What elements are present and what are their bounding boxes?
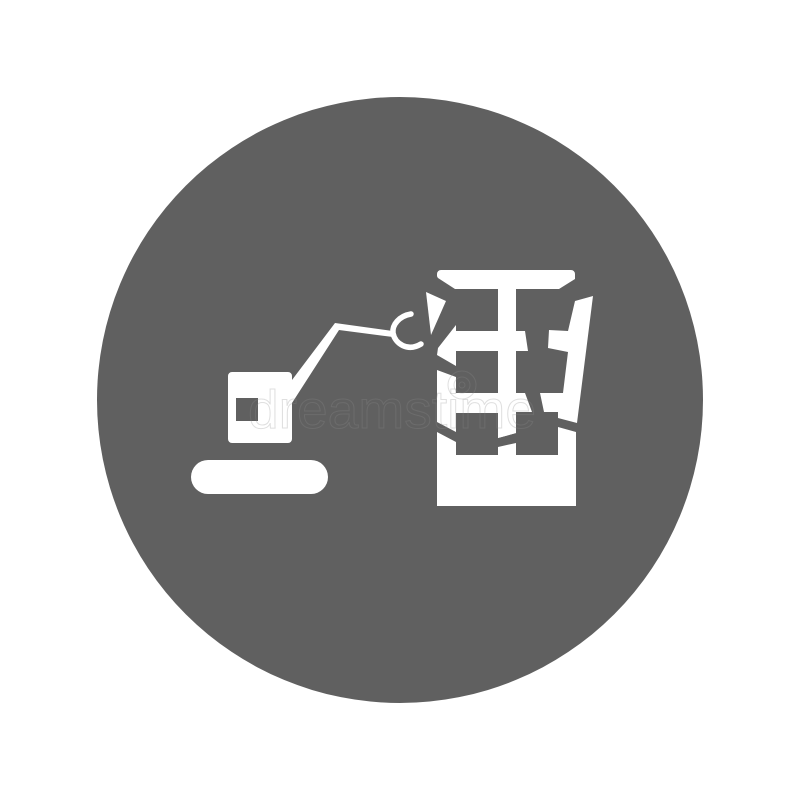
watermark text: dreamstime xyxy=(248,380,536,440)
icon: crane xyxy=(191,314,421,494)
upper floor slab xyxy=(437,325,528,366)
watermark spiral xyxy=(448,371,476,399)
crane body with window xyxy=(228,372,292,443)
roof and central column xyxy=(437,270,575,438)
crane track xyxy=(191,460,328,494)
broken wall fragment xyxy=(426,292,446,335)
icon: collapsing building xyxy=(426,270,593,506)
right wall fragment xyxy=(540,296,593,423)
crane arm xyxy=(292,323,393,403)
left wall and lower floor slab xyxy=(437,370,532,438)
crane hook xyxy=(393,314,421,347)
circular background xyxy=(97,97,703,703)
building base xyxy=(437,427,576,506)
